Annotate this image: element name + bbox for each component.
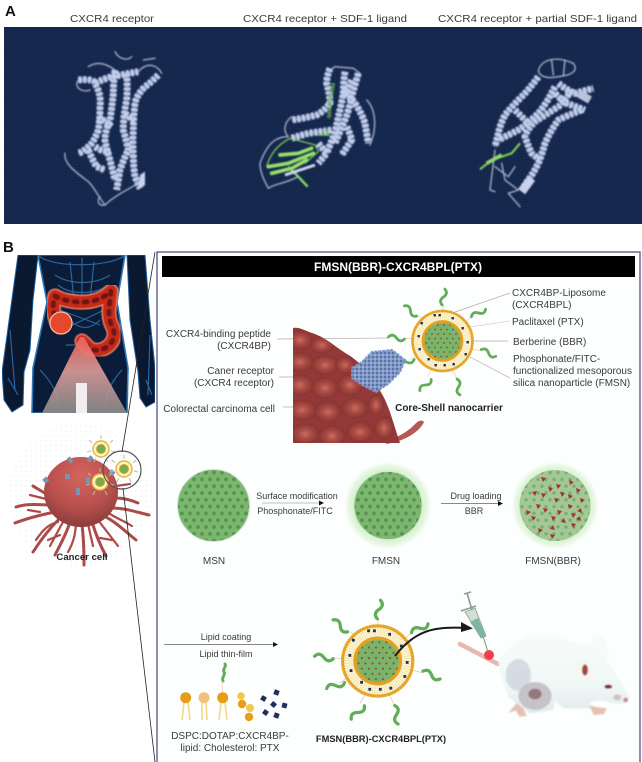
stippled backdrop behind cancer cell [8, 423, 152, 567]
injection site [484, 650, 494, 660]
illustration: colorectal carcinoma cell surface [286, 328, 424, 447]
arrow: drug loading [441, 491, 503, 516]
eye [604, 685, 612, 689]
label: colorectal carcinoma cell: Colorectal carcinoma cell [163, 404, 275, 415]
mouth [590, 701, 610, 706]
label: lipid composition: lipid: Cholesterol: PTX [181, 743, 280, 754]
protein: CXCR4 with partial SDF-1 ligand [480, 59, 593, 207]
nanocarrier: core-shell with labels [388, 289, 497, 395]
CXCR4 receptor protein [352, 350, 405, 392]
header bar [162, 256, 635, 277]
zoom lines to panel [122, 252, 155, 762]
label: cancer receptor: Caner receptor [207, 366, 274, 377]
lipid heads [180, 692, 191, 703]
header bar: FMSN(BBR)-CXCR4BPL(PTX) [314, 260, 482, 274]
leader lines [277, 293, 510, 407]
labels: right callouts [512, 288, 632, 389]
label: Cancer cell: Cancer cell [56, 552, 108, 563]
colon, highlighted red [53, 291, 114, 350]
ear [572, 660, 593, 680]
peptide on lipid [223, 664, 225, 681]
label: lipid composition: DSPC:DOTAP:CXCR4BP- [171, 731, 289, 742]
label: FMSN: functionalized mesoporous [513, 366, 632, 377]
panel B: detail frame [157, 252, 640, 762]
label: FMSN: silica nanoparticle (FMSN) [513, 378, 630, 389]
particle: FMSN: FMSN [372, 556, 400, 567]
syringe [461, 592, 488, 652]
tail [460, 644, 498, 664]
feet [508, 703, 607, 717]
label: berberine: Berberine (BBR) [513, 337, 586, 348]
protein: CXCR4 with SDF-1 ligand [260, 67, 375, 188]
cholesterol [237, 692, 245, 700]
surface receptors [42, 455, 116, 495]
label: paclitaxel: Paclitaxel (PTX) [512, 317, 584, 328]
particle: FMSN(BBR) [511, 462, 599, 567]
illustration: cancer cell with nanocarriers [15, 435, 149, 565]
back shading [506, 659, 531, 691]
panel A label: A [5, 3, 16, 20]
mouse body [498, 633, 630, 713]
nanocarrier: free [87, 435, 115, 462]
label: CXCR4-binding peptide: (CXCR4BP) [217, 341, 271, 352]
illustration: human torso with colorectal tumour [2, 255, 155, 413]
arrow: lipid coating [164, 632, 278, 659]
arrow: surface modification: Surface modification [256, 491, 338, 501]
title: CXCR4 receptor + partial SDF-1 ligand: CXCR4 receptor + partial SDF-1 ligand [438, 13, 637, 25]
label: FMSN: Phosphonate/FITC- [513, 354, 600, 365]
arrow: surface modification: Phosphonate/FITC [257, 506, 333, 516]
particle: MSN [178, 470, 250, 567]
drug triangles [526, 477, 585, 539]
tumour [518, 682, 552, 710]
label: CXCR4-binding peptide: CXCR4-binding peptide [166, 329, 271, 340]
nanocarrier: final product [314, 600, 441, 724]
arrow: drug loading: BBR [465, 506, 484, 516]
nose [623, 698, 628, 702]
panel A titles [70, 13, 637, 25]
particle: FMSN(BBR): FMSN(BBR) [525, 556, 581, 567]
label: liposome: CXCR4BP-Liposome [512, 288, 606, 299]
panel B label: B [3, 239, 14, 256]
tendrils [15, 484, 149, 565]
protein: CXCR4 receptor [65, 52, 162, 205]
torso and arms silhouette [2, 255, 155, 413]
arrow: injection into mouse [395, 622, 473, 656]
particle: MSN: MSN [203, 556, 225, 567]
magnifier circle with nanocarrier [103, 451, 141, 489]
tumour on colon [50, 312, 72, 334]
white bar in wedge [76, 383, 87, 413]
arrow: lipid coating: Lipid coating [201, 632, 251, 642]
title: CXCR4 receptor + SDF-1 ligand: CXCR4 receptor + SDF-1 ligand [243, 13, 407, 25]
lipid tails [182, 702, 227, 720]
title: CXCR4 receptor: CXCR4 receptor [70, 13, 155, 25]
arrow: surface modification [256, 491, 338, 516]
label: Core-Shell nanocarrier: Core-Shell nanocarrier [395, 403, 503, 414]
arrow: lipid coating: Lipid thin-film [199, 649, 253, 659]
illustration: mouse [498, 633, 630, 717]
labels: left callouts [163, 329, 275, 415]
particle: FMSN [344, 462, 432, 567]
label: FMSN(BBR)-CXCR4BPL(PTX): FMSN(BBR)-CXCR4BPL(PTX) [316, 734, 446, 744]
panel A: protein structures on navy background [4, 27, 642, 224]
arrow: drug loading: Drug loading [450, 491, 502, 501]
zoom wedge [42, 337, 127, 413]
paclitaxel squares [260, 689, 288, 719]
nanocarrier: bound [86, 468, 114, 495]
lipid components icons [180, 664, 288, 721]
label: cancer receptor: (CXCR4 receptor) [194, 378, 274, 389]
cell body [44, 457, 118, 527]
label: liposome: (CXCR4BPL) [512, 300, 571, 311]
